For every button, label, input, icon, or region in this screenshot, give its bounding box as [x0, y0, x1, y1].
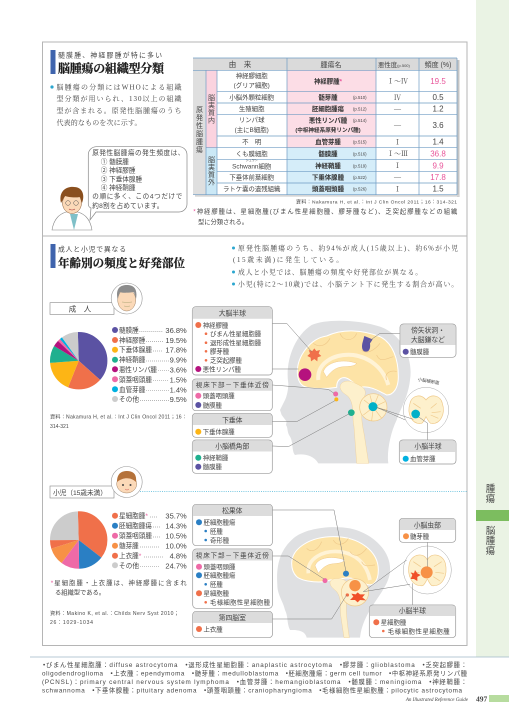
text block: classification intro: 脳腫瘍の分類にはWHOによる組織	[56, 82, 182, 92]
panel: classification heading: 脳腫瘍の組織型分類	[58, 60, 165, 76]
box: thalamus lower child: 胚腫	[210, 580, 223, 589]
glossary footer: schwannoma •下垂体腺腫：pituitary adenoma •頭蓋咽頭腫：craniopharyngioma •毛様細胞性星細胞腫：pilocytic astrocytoma	[42, 685, 462, 694]
leader lines	[272, 510, 427, 619]
table grade column: —	[393, 105, 402, 113]
label: adult with icon	[50, 283, 142, 314]
table grade column: —	[393, 174, 402, 182]
glossary footer: oligodendroglioma •上衣腫：ependymoma •髄芽腫：medulloblastoma •胚細胞腫瘍：germ cell tumor •中枢神経系原発リンパ腫	[42, 668, 468, 677]
source: adult: 資料：Nakamura H, et al.：Int J Clin Oncol 2011；16：	[50, 414, 187, 420]
table grade column: —	[393, 122, 402, 130]
box: pituitary: 下垂体腺腫	[203, 427, 235, 436]
table frequency column: 1.5	[432, 185, 444, 194]
table tumor names: 髄膜腫	[318, 149, 338, 158]
box: thalamus lower adult: 頭蓋咽頭腫	[203, 391, 235, 400]
table side labels: 脳実質外	[208, 155, 215, 186]
legend: adult pie	[112, 326, 187, 404]
box: parasagittal sinus: 大脳鎌など	[411, 335, 445, 344]
callout: doctor speech bubble: ② 神経膠腫	[101, 166, 136, 174]
callout: doctor speech bubble: の順に多く、この4つだけで	[92, 192, 183, 200]
leader lines	[232, 323, 428, 447]
panel: classification heading	[50, 50, 165, 76]
legend: child pie: 14.3%	[165, 522, 187, 531]
source: child: 26：1029-1034	[50, 620, 93, 626]
legend: child pie: 10.0%	[165, 542, 187, 551]
table frequency column: 1.2	[432, 105, 444, 114]
legend: child pie: 4.8%	[170, 552, 187, 561]
box: thalamus lower child: 視床下部－下垂体近傍	[196, 550, 269, 560]
table origin column	[223, 71, 281, 193]
source: child	[50, 610, 179, 626]
box: cerebrum: 退形成性星細胞腫	[210, 338, 262, 347]
callout: doctor speech bubble: 原発性脳腫瘍の発生頻度は、	[92, 148, 184, 157]
table side labels	[196, 93, 215, 186]
box: cerebellar hemisphere adult: 小脳半球	[414, 442, 442, 451]
panel: classification heading: 髄膜腫、神経膠腫が特に多い	[58, 50, 162, 60]
box: cerebellopontine angle: 髄膜腫	[203, 462, 222, 471]
box: cerebrum: 悪性リンパ腫	[203, 364, 242, 373]
table tumor names: (p.516)	[353, 152, 367, 156]
legend: child pie: 頭蓋咽頭腫	[119, 531, 152, 540]
side tab: 脳腫瘍	[486, 525, 496, 557]
heading: age section: 成人と小児で異なる	[58, 244, 126, 254]
legend: child pie: 10.5%	[165, 532, 187, 541]
table frequency column	[430, 77, 446, 194]
table origin column: 下垂体前葉細胞	[229, 172, 275, 182]
box: vermis: 小脳虫部	[414, 520, 441, 529]
legend: adult pie: 36.8%	[165, 326, 187, 335]
text block: classification intro: 型が含まれる。原発性脳腫瘍のうち	[56, 106, 182, 115]
box: cerebellar hemisphere child	[369, 605, 456, 638]
divider: dotted line to child	[140, 490, 467, 492]
table origin column: (グリア細胞)	[234, 80, 270, 90]
legend: adult pie: 9.9%	[170, 356, 187, 365]
callout: doctor speech bubble: ③ 下垂体腺腫	[101, 174, 143, 183]
text block: age section bullets	[232, 244, 458, 288]
box: fourth ventricle	[193, 611, 272, 638]
box: cerebellar hemisphere child: 星細胞腫	[381, 618, 407, 627]
text block: age section bullets: 小児(特に2〜10歳)では、小脳テント下に発生する割合が高い。	[238, 280, 458, 288]
table tumor names: (p.519)	[353, 164, 367, 168]
legend: adult pie: 3.6%	[170, 365, 187, 374]
box: pineal: 松果体	[222, 506, 243, 515]
box: cerebrum: 乏突起膠腫	[210, 356, 243, 365]
note: glioma	[193, 206, 458, 226]
table side labels: 脳実質内	[208, 93, 215, 124]
legend: adult pie: 19.5%	[165, 336, 187, 345]
table tumor names: 頭蓋咽頭腫	[312, 184, 345, 193]
note: glioma: 型に分類される。	[198, 217, 248, 226]
callout: doctor speech bubble: ④ 神経鞘腫	[101, 183, 136, 192]
box: cerebrum: 神経膠腫	[203, 320, 229, 329]
table tumor names: 神経鞘腫	[315, 161, 341, 170]
table header: 頻度 (%)	[425, 60, 451, 69]
table tumor names: 胚細胞腫瘍	[312, 104, 345, 113]
box: vermis: 髄芽腫	[410, 532, 430, 541]
caption: cerebellar section: 小脳横断面	[417, 376, 441, 387]
table header: 由 来	[229, 59, 252, 69]
outer panel frame	[42, 42, 467, 646]
table frequency column: 17.8	[430, 173, 446, 182]
legend: adult pie: 髄膜腫	[119, 326, 139, 334]
glossary footer: (PCNSL)：primary central nervous system lymphoma •血管芽腫：hemangioblastoma •髄膜腫：meningioma •神経鞘腫：	[42, 677, 467, 686]
note: glioma: *神経膠腫は、星細胞腫(びまん性星細胞腫、膠芽腫など)、乏突起膠腫などの組織	[193, 206, 458, 216]
source: table: 資料：Nakamura H, et al.：Int J Clin Oncol 2011；16：314-321	[296, 198, 457, 206]
box: cerebellar hemisphere child: 毛様細胞性星細胞腫	[388, 626, 450, 635]
table grade column: Ⅳ	[394, 94, 401, 102]
box: cerebellopontine angle: 小脳橋角部	[215, 442, 249, 450]
note: child: *星細胞腫・上衣腫は、神経膠腫に含まれ	[51, 578, 187, 587]
table origin column: リンパ球	[239, 115, 265, 124]
box: thalamus lower child: 胚細胞腫瘍	[204, 571, 236, 580]
icon: doctor	[52, 187, 92, 230]
box: pineal: 胚細胞腫瘍	[204, 518, 236, 527]
table tumor names: (p.510)	[353, 95, 367, 100]
table origin column: 小脳外顆粒細胞	[229, 92, 275, 102]
legend: child pie: その他	[119, 561, 139, 570]
box: cerebrum	[192, 307, 272, 375]
table tumor names: (p.522)	[353, 175, 367, 180]
cerebellum inset	[403, 546, 451, 594]
page footer: An Illustrated Reference Guide	[405, 698, 469, 703]
chart: child pie	[64, 526, 93, 554]
box: pineal: 胚腫	[210, 526, 223, 535]
callout: doctor speech bubble: ① 髄膜腫	[101, 157, 129, 166]
heading: age section	[50, 244, 186, 270]
side tab	[476, 0, 509, 657]
text block: classification intro	[50, 82, 182, 127]
table origin column: 生殖細胞	[239, 104, 265, 113]
table tumor names: (p.515)	[353, 140, 367, 144]
table frequency column: 9.9	[432, 162, 444, 171]
box: vermis	[399, 518, 456, 542]
page footer	[405, 694, 509, 704]
side tab: 腫瘍	[486, 484, 496, 505]
table tumor names: 下垂体腺腫	[312, 172, 345, 182]
box: thalamus lower adult	[192, 379, 272, 411]
glossary footer	[42, 660, 468, 694]
table tumor names: (p.514)	[353, 118, 367, 123]
tumor markers	[322, 571, 366, 602]
table origin column: 神経膠細胞	[236, 71, 268, 80]
table origin column: ラトケ嚢の遺残組織	[223, 184, 281, 193]
legend: child pie	[112, 511, 187, 570]
legend: adult pie: 1.4%	[170, 385, 187, 394]
box: fourth ventricle: 上衣腫	[204, 624, 223, 633]
table grade column	[387, 78, 408, 193]
legend: adult pie: 血管芽腫	[119, 385, 146, 394]
box: pineal: 奇形腫	[210, 535, 230, 544]
source: adult	[50, 414, 187, 430]
box: parasagittal sinus	[400, 324, 456, 357]
table tumor names	[295, 76, 367, 193]
box: cerebrum: びまん性星細胞腫	[210, 329, 262, 338]
table origin column: 不 明	[242, 138, 261, 146]
table frequency column: 3.6	[432, 121, 444, 130]
box: thalamus lower child: 毛様細胞性星細胞腫	[210, 598, 271, 607]
legend: adult pie: 下垂体腺腫	[119, 345, 152, 354]
legend: child pie: 上衣腫*	[119, 551, 142, 560]
legend: adult pie: 9.5%	[170, 395, 187, 404]
table grade column: Ⅰ	[394, 162, 401, 170]
box: cerebellar hemisphere adult	[399, 440, 456, 464]
table tumor names: 血管芽腫	[315, 137, 341, 146]
box: pineal	[193, 504, 272, 546]
box: cerebrum: 大脳半球	[219, 308, 246, 317]
table grade column: Ⅰ	[394, 185, 401, 193]
table: tumor classification	[193, 58, 460, 197]
tumor markers	[299, 336, 377, 416]
table frequency column: 1.4	[432, 138, 444, 147]
table tumor names: 悪性リンパ腫	[309, 116, 348, 124]
diagram: child brain	[272, 510, 451, 638]
text block: age section bullets: 原発性脳腫瘍のうち、約94%が成人(15歳以上)、約6%が小児	[238, 244, 458, 252]
label: adult with icon: 成 人	[69, 304, 92, 314]
callout: doctor speech bubble	[88, 147, 187, 220]
box: thalamus lower child: 頭蓋咽頭腫	[204, 562, 236, 571]
source: child: 資料：Makino K, et al.：Childs Nerv Syst 2010；	[50, 610, 179, 617]
box: thalamus lower adult: 視床下部－下垂体近傍	[196, 380, 269, 389]
legend: child pie: 星細胞腫*	[119, 511, 148, 520]
table tumor names: (p.526)	[353, 186, 367, 192]
text block: classification intro: 代表的なものを次に示す。	[56, 118, 142, 127]
table header: 悪性度(p.500)	[378, 60, 411, 69]
box: fourth ventricle: 第四脳室	[219, 613, 246, 622]
box: parasagittal sinus: 傍矢状洞・	[411, 326, 445, 334]
table origin column: シュワン	[246, 157, 258, 162]
box: cerebellopontine angle	[192, 440, 272, 473]
box: thalamus lower adult: 髄膜腫	[203, 400, 222, 409]
glossary footer: •びまん性星細胞腫：diffuse astrocytoma •退形成性星細胞腫：anaplastic astrocytoma •膠芽腫：glioblastoma •乏突起膠腫：	[43, 660, 467, 669]
table header	[229, 59, 451, 69]
chart: adult pie	[64, 346, 93, 375]
table header: 腫瘍名	[320, 60, 342, 69]
legend: adult pie: 頭蓋咽頭腫	[119, 375, 152, 384]
text block: classification intro: 型分類が用いられ、130以上の組織	[56, 94, 182, 103]
legend: child pie: 髄芽腫	[119, 541, 139, 550]
table tumor names: (p.512)	[353, 106, 367, 112]
table grade column: Ⅰ〜Ⅲ	[387, 150, 408, 158]
label: child with icon	[50, 466, 142, 498]
note: child: る組織型である。	[55, 588, 105, 596]
diagram: adult brain	[232, 321, 449, 463]
table origin column: (主にB細胞)	[235, 125, 269, 134]
table origin column: くも膜細胞	[236, 149, 268, 158]
table grade column: Ⅰ	[394, 138, 401, 146]
box: cerebrum: 膠芽腫	[210, 347, 230, 356]
table origin column: Schwann細胞	[232, 162, 272, 170]
table frequency column: 36.8	[430, 150, 446, 159]
legend: child pie: 胚細胞腫瘍	[119, 521, 152, 530]
legend: adult pie: その他	[119, 394, 139, 404]
heading: age section: 年齢別の頻度と好発部位	[58, 256, 186, 270]
box: cerebellar hemisphere child: 小脳半球	[399, 606, 426, 615]
table side labels: 原発性脳腫瘍	[196, 106, 203, 154]
box: cerebellopontine angle: 神経鞘腫	[203, 453, 229, 462]
legend: adult pie: 神経膠腫	[119, 336, 146, 344]
legend: child pie: 35.7%	[165, 512, 187, 521]
table tumor names: 髄芽腫	[318, 92, 338, 102]
footer rule	[30, 656, 509, 658]
text block: age section bullets: (15歳未満)に発生している。	[233, 255, 343, 264]
box: cerebellar hemisphere adult: 血管芽腫	[410, 454, 436, 463]
callout: doctor speech bubble: 約8割を占めています。	[92, 201, 163, 210]
label: child with icon: 小児（15歳未満）	[53, 488, 107, 497]
box: pituitary	[192, 413, 272, 437]
page footer: 497	[476, 694, 488, 704]
box: pituitary: 下垂体	[222, 415, 243, 424]
legend: adult pie: 17.8%	[165, 346, 187, 355]
table frequency column: 19.5	[430, 77, 446, 86]
table frequency column: 0.5	[432, 93, 444, 102]
table tumor names: 神経膠腫*	[314, 76, 343, 86]
text block: age section bullets: 成人と小児では、脳腫瘍の頻度や好発部位が異なる。	[238, 268, 422, 276]
box: parasagittal sinus: 髄膜腫	[410, 347, 430, 356]
legend: adult pie: 神経鞘腫	[119, 355, 146, 364]
legend: adult pie: 悪性リンパ腫	[119, 365, 157, 374]
legend: adult pie: 1.5%	[170, 375, 187, 384]
box: thalamus lower child	[193, 549, 272, 608]
note: child	[51, 578, 187, 596]
source: adult: 314-321	[50, 424, 69, 430]
box: thalamus lower child: 星細胞腫	[204, 589, 230, 598]
table grade column: Ⅰ〜Ⅳ	[387, 78, 408, 86]
cerebellum inset	[403, 387, 449, 433]
legend: child pie: 24.7%	[165, 561, 187, 570]
table tumor names: (中枢神経系原発リンパ腫)	[295, 126, 361, 134]
